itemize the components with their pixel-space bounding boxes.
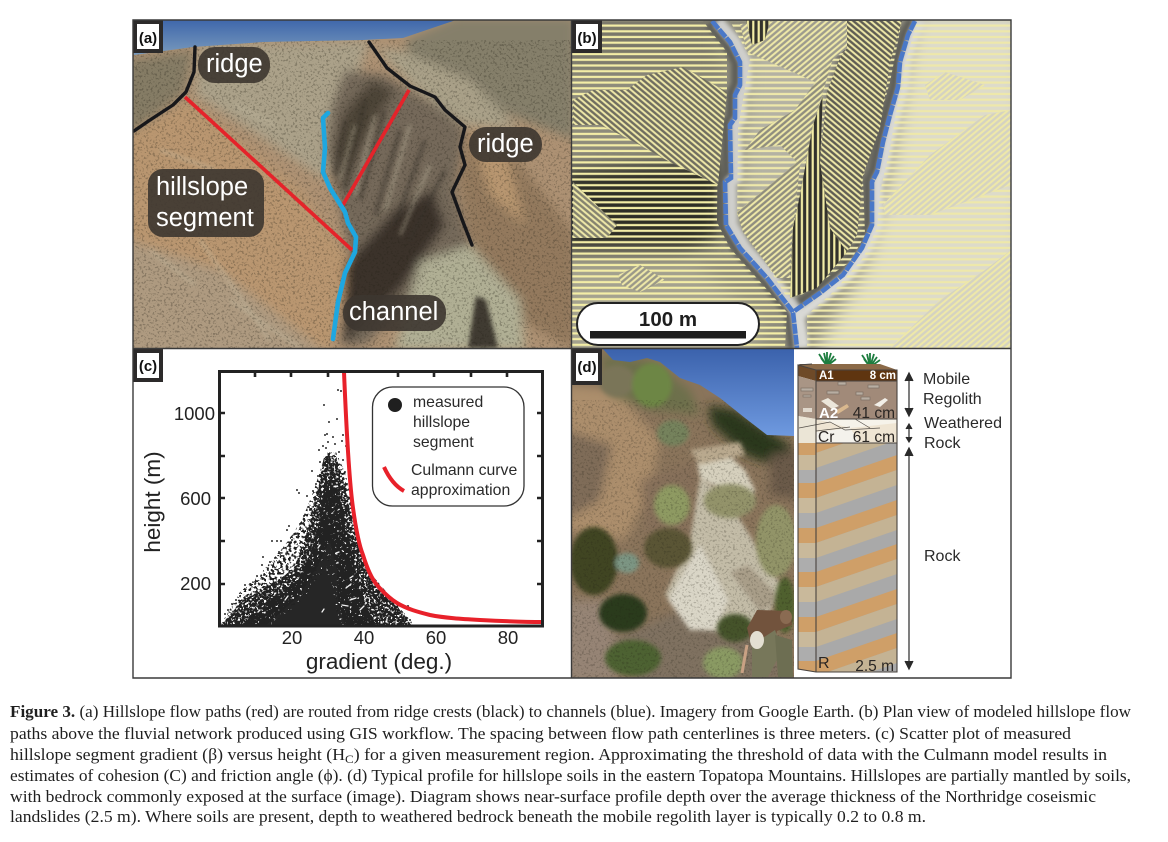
layer Cr: Cr — [818, 429, 834, 446]
figure caption: paths above the fluvial network produced using GIS workflow. The spacing between flow path centerlines is three meters. (c) Scatter plot of measured — [10, 724, 1071, 743]
figure caption — [10, 702, 1131, 826]
panel tag (c) — [135, 351, 161, 380]
x axis labels: 80 — [498, 627, 518, 648]
legend: Culmann curve — [411, 462, 517, 479]
sky — [603, 349, 794, 436]
figure caption: ) for a given measurement region. Approximating the threshold of data with the Culmann model results in — [354, 745, 1107, 764]
label: weathered rock: Weathered — [924, 415, 1002, 432]
label: mobile regolith: Regolith — [923, 391, 982, 408]
label: hillslope segment — [148, 169, 264, 237]
layer R: rock strata — [798, 443, 896, 672]
arrow: mobile regolith — [905, 373, 913, 416]
panel d: field photo — [565, 349, 800, 685]
panel c: scatter plot — [133, 349, 571, 678]
panel tag (b): (b) — [577, 30, 597, 47]
shaded terrain background — [572, 20, 1010, 348]
y axis labels: 200 — [180, 573, 211, 594]
figure caption: hillslope segment gradient (β) versus height (H — [10, 745, 319, 764]
ridge lines (black) — [134, 42, 472, 245]
y axis title: height (m) — [140, 451, 165, 553]
soil profile diagram — [797, 352, 1001, 672]
Culmann curve (red) — [344, 372, 542, 622]
label: weathered rock: Rock — [924, 435, 961, 452]
layer R: rock strata: 2.5 m — [855, 658, 894, 675]
label: weathered rock — [924, 415, 1002, 452]
panel tag (c): (c) — [139, 358, 157, 375]
x axis labels — [282, 627, 518, 648]
legend: measured — [413, 394, 483, 411]
panel tag (a): (a) — [139, 30, 157, 47]
scale bar: 100 m — [639, 308, 697, 331]
label: hillslope segment: segment — [156, 204, 254, 232]
label: rock: Rock — [924, 548, 961, 565]
person — [742, 610, 793, 677]
label: channel: channel — [349, 298, 438, 326]
legend: hillslope — [413, 414, 470, 431]
layer A1: 8 cm — [870, 370, 896, 382]
legend: segment — [413, 434, 474, 451]
y axis labels — [174, 403, 215, 594]
layer A2: A2 — [819, 405, 838, 422]
figure caption: C — [345, 752, 354, 766]
panel tag (d) — [574, 351, 600, 383]
stream network (blue) — [712, 21, 915, 348]
legend: approximation — [411, 482, 510, 499]
icon: grass tufts — [819, 352, 880, 367]
layer Cr — [798, 416, 897, 446]
legend — [372, 387, 524, 506]
figure caption: estimates of cohesion (C) and friction angle (ϕ). (d) Typical profile for hillslope soils in the eastern Topatopa Mountains. Hillslopes are partially mantled by soils, — [10, 766, 1131, 785]
label: ridge right — [469, 127, 542, 162]
column outline — [798, 364, 897, 672]
panel tag (b) — [574, 22, 600, 51]
label: ridge right: ridge — [477, 130, 534, 158]
channel (blue) — [323, 113, 356, 339]
label: channel — [343, 295, 446, 331]
panel tag (a) — [135, 22, 161, 51]
label: mobile regolith — [923, 371, 982, 408]
diagonal patches — [573, 20, 1011, 348]
photograph scene — [565, 349, 800, 685]
scatter: measured hillslope segments — [220, 390, 415, 626]
layer Cr: 61 cm — [853, 429, 895, 446]
figure frame — [133, 20, 1011, 678]
label: mobile regolith: Mobile — [923, 371, 970, 388]
y axis labels: 1000 — [174, 403, 215, 424]
x axis title: gradient (deg.) — [306, 649, 452, 674]
x axis labels: 20 — [282, 627, 302, 648]
layer A2 — [798, 376, 897, 422]
label: hillslope segment: hillslope — [156, 173, 248, 201]
y axis labels: 600 — [180, 488, 211, 509]
flow path stripes — [572, 21, 1011, 348]
terrain imagery — [128, 18, 575, 355]
arrow: weathered rock — [906, 424, 912, 442]
layer A1 — [798, 364, 897, 382]
figure caption: landslides (2.5 m). Where soils are present, depth to weathered bedrock beneath the mobile regolith layer is typically 0.2 to 0.8 m. — [10, 807, 926, 826]
figure caption: Figure 3. (a) Hillslope flow paths (red) are routed from ridge crests (black) to channels (blue). Imagery from Google Earth. (b) Plan view of modeled hillslope flow — [10, 702, 1131, 721]
figure caption: with bedrock commonly exposed at the surface (image). Diagram shows near-surface profile depth over the average thickness of the Northridge coseismic — [10, 787, 1096, 806]
scale bar — [577, 303, 759, 345]
label: ridge left: ridge — [206, 50, 263, 78]
label: ridge left — [198, 47, 270, 83]
x axis labels: 60 — [426, 627, 446, 648]
layer A2: 41 cm — [853, 405, 895, 422]
flow paths (red) — [185, 90, 409, 250]
panel b: modeled flow paths map — [572, 20, 1010, 348]
panel a: hillslope aerial view — [128, 18, 575, 355]
layer R: rock strata: R — [818, 655, 830, 672]
sky — [133, 20, 455, 55]
x axis labels: 40 — [354, 627, 374, 648]
arrow: rock — [905, 448, 913, 669]
panel tag (d): (d) — [577, 359, 597, 376]
layer A1: A1 — [819, 370, 834, 382]
stream halo — [712, 21, 921, 348]
plot frame and ticks — [220, 372, 542, 626]
